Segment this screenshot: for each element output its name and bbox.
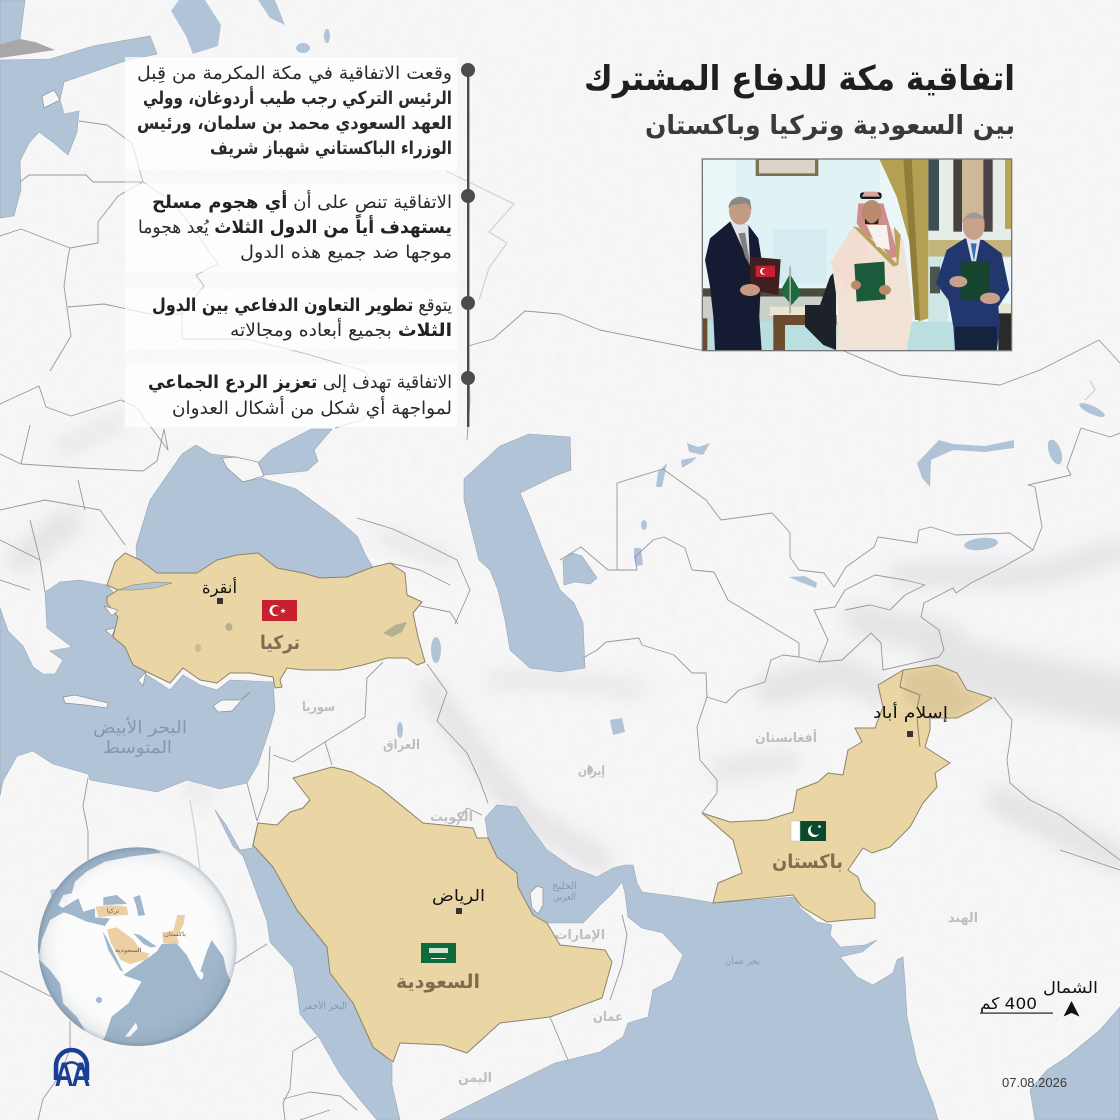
text block 3: يتوقع تطوير التعاون الدفاعي بين الدول bbox=[152, 295, 452, 316]
text block 4: لمواجهة أي شكل من أشكال العدوان bbox=[172, 396, 452, 419]
text block 4: الاتفاقية تهدف إلى تعزيز الردع الجماعي bbox=[148, 372, 452, 393]
label: Iraq: العراق bbox=[383, 738, 420, 753]
lakes bbox=[50, 0, 1106, 900]
locator globe bbox=[38, 847, 237, 1046]
label: Yemen: اليمن bbox=[458, 1071, 492, 1086]
label: Mediterranean: المتوسط bbox=[103, 738, 172, 758]
text block 1: العهد السعودي محمد بن سلمان، ورئيس bbox=[137, 113, 452, 134]
timeline bbox=[461, 63, 475, 427]
panel: agreement text bbox=[125, 57, 475, 427]
globe: Mediterranean bbox=[58, 898, 110, 926]
flag: Turkey bbox=[262, 600, 297, 621]
label: UAE: الإمارات bbox=[555, 928, 605, 943]
label: Mediterranean bbox=[93, 717, 187, 758]
scale and north arrow bbox=[980, 978, 1098, 1016]
rivers bbox=[190, 171, 1095, 870]
globe labels: تركيا bbox=[107, 908, 120, 915]
Mohammed bin Salman bbox=[832, 227, 913, 351]
photo: three leaders signing bbox=[702, 159, 1012, 351]
label: Arabian Gulf: الخليج bbox=[552, 881, 577, 892]
globe: North Atlantic bbox=[38, 847, 162, 954]
islands bbox=[42, 90, 543, 914]
globe: lake bbox=[96, 997, 102, 1003]
label: Oman Sea: بحر عمان bbox=[725, 957, 760, 967]
label: Red Sea: البحر الأحمر bbox=[302, 999, 347, 1012]
Riyadh marker and label bbox=[432, 886, 485, 914]
lake Tuz bbox=[226, 623, 232, 631]
Ankara marker and label: أنقرة bbox=[202, 577, 237, 598]
north arrow bbox=[1064, 1001, 1080, 1016]
Erdogan bbox=[705, 222, 762, 351]
text block 2: موجها ضد جميع هذه الدول bbox=[240, 242, 452, 263]
sea: Arabian Sea and Gulf bbox=[440, 805, 938, 1120]
globe: Saudi Arabia bbox=[107, 927, 149, 964]
text block 2: يستهدف أياً من الدول الثلاث يُعد هجوما bbox=[138, 214, 452, 238]
country: Turkey bbox=[107, 553, 425, 688]
Islamabad marker and label: إسلام أباد bbox=[873, 702, 948, 722]
country: Pakistan bbox=[702, 665, 992, 922]
globe: Caspian bbox=[133, 895, 145, 916]
Shehbaz Sharif bbox=[936, 238, 1009, 351]
label: Pakistan: باكستان bbox=[772, 851, 843, 873]
sea: Mediterranean bbox=[0, 580, 275, 796]
sea: Caspian bbox=[464, 434, 585, 672]
label: Arabian Gulf: العربي bbox=[553, 892, 576, 903]
text block 1: الرئيس التركي رجب طيب أردوغان، وولي bbox=[143, 86, 452, 109]
map labels bbox=[93, 700, 978, 1086]
lake Van bbox=[383, 622, 407, 637]
sea: Black Sea bbox=[136, 445, 376, 582]
logo: Anadolu Agency: AA bbox=[55, 1057, 90, 1094]
text block 3 bbox=[152, 295, 452, 341]
Kashmir line bbox=[900, 670, 920, 747]
label: Syria: سوريا bbox=[302, 700, 335, 715]
label: Arabian Gulf bbox=[552, 881, 577, 903]
globe: Black Sea bbox=[103, 895, 127, 905]
globe: Persian Gulf bbox=[133, 933, 157, 947]
sea: Gulf of Bothnia bbox=[0, 0, 25, 45]
text block 1: وقعت الاتفاقية في مكة المكرمة من قِبل bbox=[137, 63, 452, 84]
terrain relief bbox=[20, 420, 1120, 860]
flag: Saudi Arabia bbox=[421, 943, 456, 963]
Marmara sea bbox=[118, 582, 172, 590]
label: Saudi Arabia: السعودية bbox=[396, 971, 480, 993]
date: 07.08.2026 bbox=[1002, 1075, 1067, 1090]
text block 1: الوزراء الباكستاني شهباز شريف bbox=[210, 138, 452, 159]
label: Kuwait: الكويت bbox=[430, 810, 473, 825]
label: India: الهند bbox=[948, 911, 978, 926]
globe: Turkey bbox=[96, 905, 128, 917]
globe: Indian Ocean bbox=[103, 940, 231, 1046]
globe labels bbox=[107, 908, 186, 954]
Ankara marker and label bbox=[202, 577, 237, 604]
lagoon: Kara-Bogaz bbox=[563, 553, 597, 585]
sea: Baltic bbox=[0, 36, 157, 218]
scale bar bbox=[980, 1012, 1053, 1014]
sea: Red Sea bbox=[215, 810, 400, 1120]
globe: Red Sea bbox=[103, 932, 123, 972]
text block 2: الاتفاقية تنص على أن أي هجوم مسلح bbox=[152, 190, 452, 213]
background strips bbox=[125, 57, 457, 427]
label: Turkey: تركيا bbox=[260, 632, 300, 654]
text block 3: الثلاث بجميع أبعاده ومجالاته bbox=[230, 318, 452, 341]
country: Saudi Arabia bbox=[253, 767, 612, 1062]
subtitle: بين السعودية وتركيا وباكستان bbox=[645, 111, 1015, 141]
title: اتفاقية مكة للدفاع المشترك bbox=[584, 59, 1015, 99]
globe labels: السعودية bbox=[115, 948, 142, 954]
globe: Sri Lanka bbox=[199, 971, 203, 979]
label: Oman: عمان bbox=[593, 1010, 623, 1025]
text block 2 bbox=[138, 190, 452, 263]
archipelago rocks bbox=[0, 39, 55, 58]
label: Afghanistan: أفغانستان bbox=[755, 729, 817, 746]
Riyadh marker and label: الرياض bbox=[432, 886, 485, 906]
globe: Madagascar bbox=[125, 1023, 138, 1037]
text block 1 bbox=[137, 63, 452, 159]
label: Mediterranean: البحر الأبيض bbox=[93, 717, 187, 738]
sea: Bay of Bengal bbox=[1030, 1007, 1120, 1120]
globe: Atlantic bbox=[38, 960, 86, 1032]
label: Iran: إيران bbox=[578, 764, 605, 779]
flag: Pakistan bbox=[791, 821, 826, 841]
sea: Azov bbox=[257, 429, 332, 475]
globe: Pakistan bbox=[162, 915, 185, 943]
north label: الشمال bbox=[1043, 978, 1098, 997]
globe labels: باكستان bbox=[164, 931, 186, 938]
text block 4 bbox=[148, 372, 452, 419]
Islamabad marker and label bbox=[873, 702, 948, 737]
Kashmir shading bbox=[905, 667, 985, 716]
scale label: 400 كم bbox=[980, 994, 1037, 1013]
